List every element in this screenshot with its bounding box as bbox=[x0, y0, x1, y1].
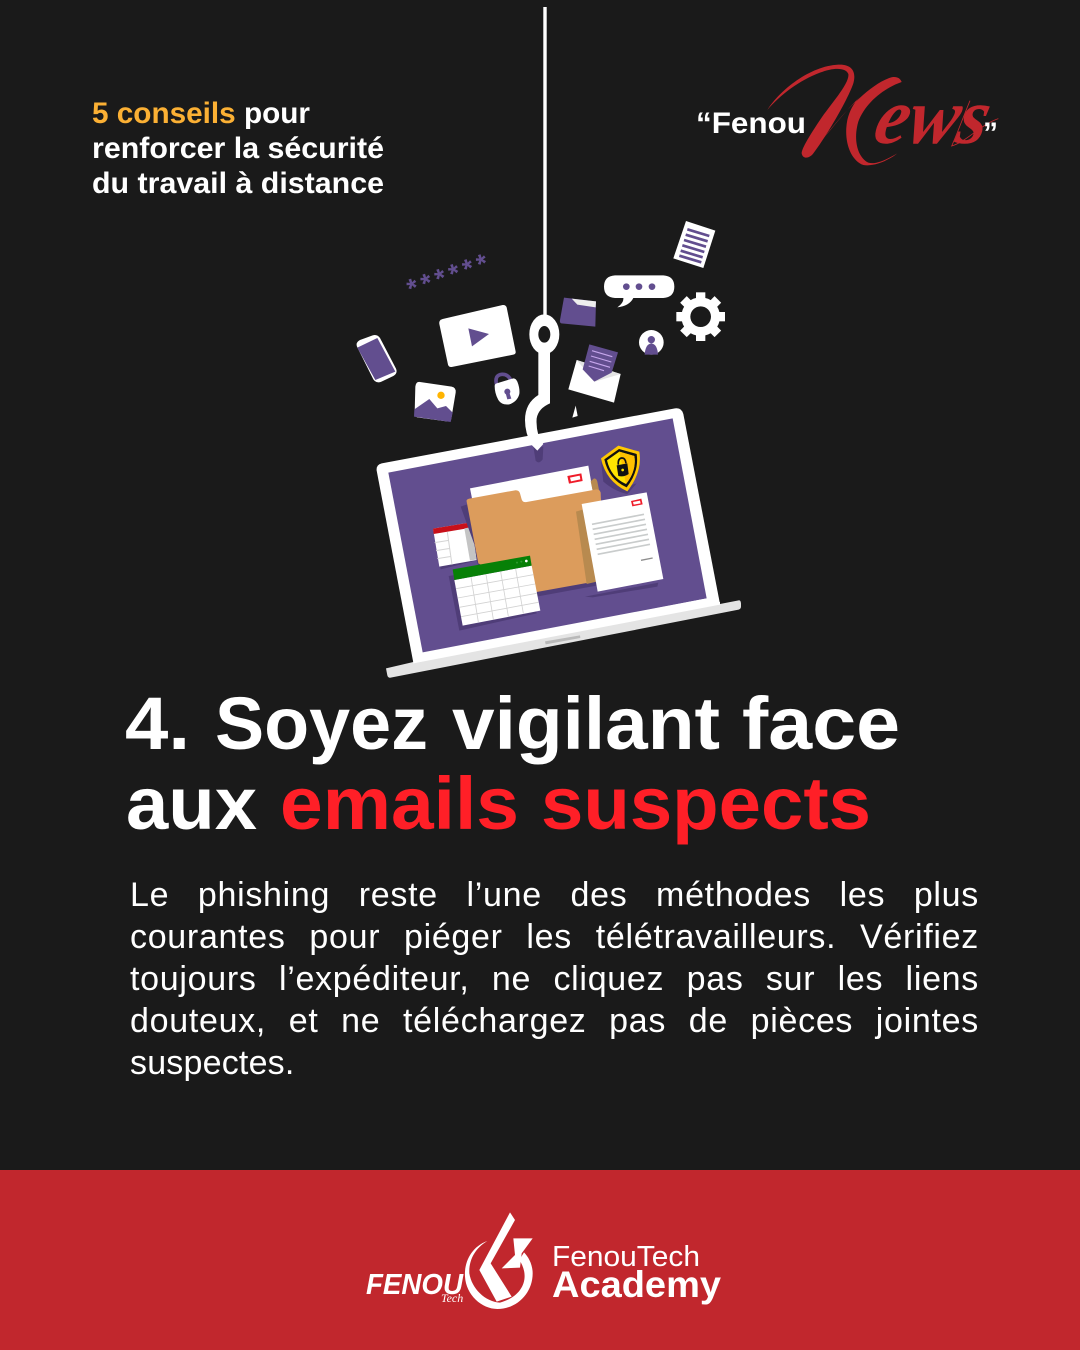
footer band bbox=[0, 1170, 1080, 1350]
body paragraph bbox=[130, 876, 979, 1082]
title line two: suspects bbox=[541, 762, 871, 845]
body paragraph: toujours l’expéditeur, ne cliquez pas sur les liens bbox=[130, 960, 979, 998]
icon: document list bbox=[673, 221, 715, 268]
quoted Fenou text: “Fenou bbox=[696, 107, 806, 140]
series heading: du travail à distance bbox=[92, 167, 384, 200]
academy label: FenouTech bbox=[552, 1241, 700, 1273]
calendar window bbox=[433, 522, 478, 569]
series heading bbox=[92, 97, 384, 200]
icon: password asterisks: ****** bbox=[403, 246, 496, 304]
manila folder bbox=[461, 466, 603, 597]
laptop front lip bbox=[413, 598, 720, 663]
icon: purple folder bbox=[560, 298, 596, 327]
series heading: renforcer la sécurité bbox=[92, 132, 384, 165]
trackpad notch bbox=[545, 635, 580, 644]
brand mark: Fenou News bbox=[696, 65, 1001, 165]
icon: gear bbox=[676, 292, 725, 341]
icon: photo bbox=[414, 382, 456, 422]
footer logo bbox=[366, 1212, 721, 1309]
security shield bbox=[601, 446, 640, 494]
title line two: aux bbox=[126, 762, 257, 845]
icon: smartphone bbox=[357, 335, 397, 382]
laptop bbox=[377, 408, 741, 678]
title line one: face bbox=[742, 682, 900, 765]
closing quote: ” bbox=[983, 117, 998, 150]
laptop base bar bbox=[386, 600, 741, 678]
icon: video player bbox=[439, 305, 516, 367]
icon: spark fragment bbox=[572, 406, 578, 418]
academy label bbox=[552, 1241, 721, 1305]
folder paper stamp bbox=[567, 473, 583, 484]
spreadsheet window bbox=[449, 556, 540, 631]
illustration: phishing hook over laptop bbox=[357, 7, 741, 678]
logo flame emblem bbox=[465, 1212, 533, 1309]
icon: padlock bbox=[495, 374, 519, 404]
icon: envelope with letter bbox=[568, 344, 621, 403]
title line one: vigilant bbox=[452, 682, 720, 765]
body paragraph: suspectes. bbox=[130, 1044, 295, 1082]
title line one: Soyez bbox=[215, 682, 428, 765]
title line one: 4. bbox=[125, 682, 190, 765]
logo tagline: Tech bbox=[441, 1291, 463, 1305]
title line two: emails bbox=[280, 762, 519, 845]
hook shadow bbox=[533, 447, 543, 462]
hook area icons bbox=[495, 314, 621, 451]
laptop lid bbox=[377, 408, 720, 663]
title line one bbox=[125, 682, 900, 765]
logo wordmark: FENOU bbox=[366, 1269, 464, 1301]
body paragraph: courantes pour piéger les télétravailleurs. Vérifiez bbox=[130, 918, 979, 956]
icon: user badge bbox=[639, 330, 664, 355]
icon: chat bubble bbox=[604, 275, 674, 307]
academy label: Academy bbox=[552, 1264, 721, 1305]
series heading: 5 conseils pour bbox=[92, 97, 310, 130]
body paragraph: Le phishing reste l’une des méthodes les plus bbox=[130, 876, 979, 914]
body paragraph: douteux, et ne téléchargez pas de pièces jointes bbox=[130, 1002, 979, 1040]
fishing line bbox=[543, 7, 547, 317]
laptop screen bbox=[388, 418, 707, 652]
script swash of News bbox=[767, 65, 998, 165]
script word News: ews bbox=[867, 72, 1001, 161]
floating icons bbox=[357, 221, 725, 422]
document page bbox=[576, 492, 663, 597]
fish hook bbox=[525, 314, 559, 451]
title line two bbox=[126, 762, 871, 845]
main title bbox=[125, 682, 900, 845]
